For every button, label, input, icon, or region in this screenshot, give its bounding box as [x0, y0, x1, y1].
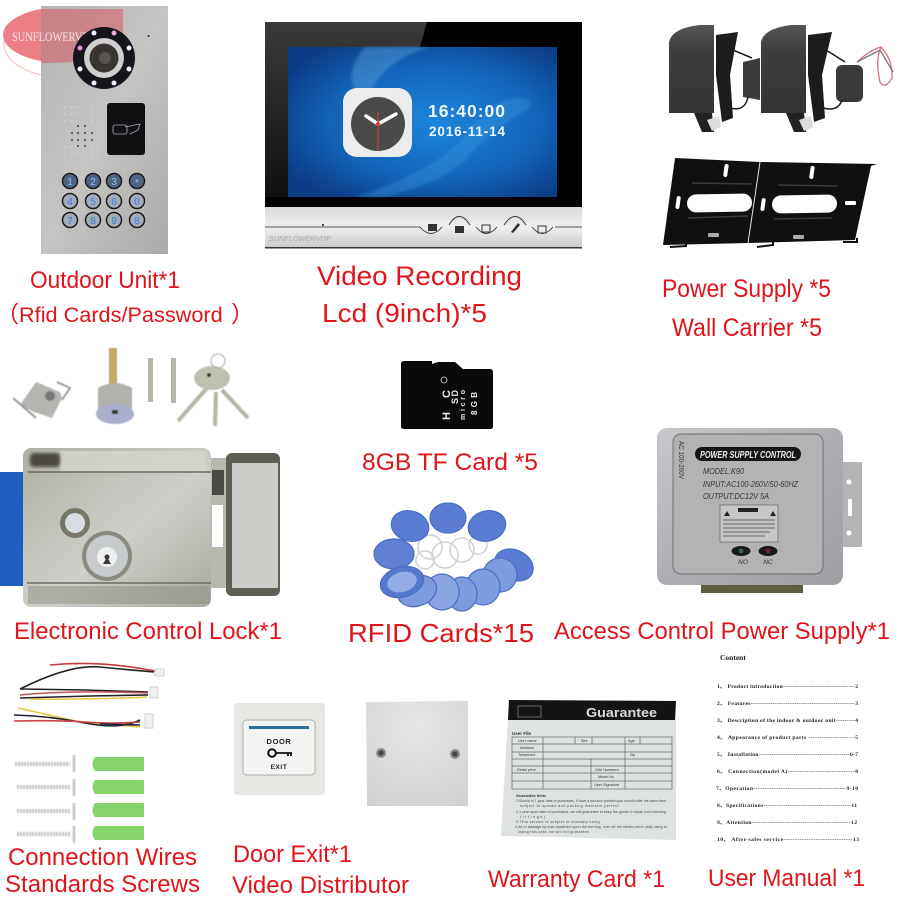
icon: manual contents page: 1、 Product introduction----------------------------------2 — [717, 684, 858, 690]
icon: door station: 5 — [90, 197, 96, 208]
caption: rfid cards / password: ） — [231, 301, 254, 327]
panel: tf card — [362, 361, 538, 476]
caption: power supply: Power Supply *5 — [662, 275, 831, 303]
icon: door station: 7 — [67, 216, 73, 227]
icon: door station: 2 — [90, 177, 96, 188]
panel: video monitor — [265, 22, 582, 328]
icon: door exit button: EXIT — [271, 764, 287, 771]
caption: lcd size: Lcd (9inch)*5 — [322, 298, 487, 328]
caption: connection wires: Connection Wires — [8, 844, 197, 871]
icon: manual contents page — [716, 653, 859, 843]
icon: lcd monitor: 16:40:00 — [428, 101, 505, 121]
caption: wall carrier: Wall Carrier *5 — [672, 314, 822, 342]
icon: lcd monitor: SUNFLOWERVOP — [269, 234, 331, 243]
icon: lcd monitor — [265, 22, 582, 248]
icon: manual contents page: Content — [720, 653, 746, 662]
icon: lock cylinder — [96, 348, 134, 424]
panel: door exit and video distributor — [232, 701, 468, 899]
icon: guarantee card: Retail price — [517, 768, 536, 772]
icon: power control box: NC — [763, 559, 773, 566]
icon: wall carriers — [663, 158, 877, 247]
caption: access control power supply: Access Control Power Supply*1 — [554, 618, 890, 645]
icon: guarantee card: Guarantee — [586, 705, 657, 720]
panel: power supply and wall carrier — [662, 25, 893, 342]
panel: electronic control lock — [0, 348, 282, 645]
icon: lcd monitor: 2016-11-14 — [429, 124, 505, 139]
caption: standards screws: Standards Screws — [5, 871, 200, 898]
icon: manual contents page: 10、 After-sales service------------------------------13 — [717, 837, 859, 843]
panel: access control power supply — [554, 428, 890, 645]
icon: video distributor box — [366, 701, 468, 806]
icon: door station: 1 — [67, 177, 73, 188]
caption: user manual: User Manual *1 — [708, 865, 865, 892]
icon: guarantee card: User File — [512, 731, 532, 736]
caption: warranty card: Warranty Card *1 — [488, 866, 665, 893]
icon: guarantee card: 4.All of damage by man-made/act upon the burning, over off the strides,emot nally using or — [515, 825, 668, 829]
icon: guarantee card: Model No — [598, 775, 614, 779]
icon: power adapters — [669, 25, 893, 132]
icon: guarantee card: Age — [628, 739, 635, 743]
icon: manual contents page: 9、Attention---------------------------------------------12 — [717, 820, 857, 826]
icon: micro sd card: 8GB — [470, 392, 479, 415]
icon: power control box: NO — [738, 559, 748, 566]
icon: mounting bracket — [13, 382, 70, 418]
panel: outdoor unit — [0, 6, 254, 327]
icon: rfid key fobs — [374, 503, 538, 612]
icon: manual contents page: 8、Specifications----------------------------------------11 — [717, 803, 857, 809]
icon: guarantee card: 1.Should in 1 year date of purchases, if have a function problem,you should offer the same item — [516, 799, 666, 803]
icon: electric lock body — [0, 448, 280, 607]
icon: manual contents page: 5、 Installation------------------------------------------6-7 — [717, 752, 858, 758]
panel: connection wires and screws — [5, 663, 200, 898]
icon: screws — [15, 755, 74, 843]
icon: micro sd card: HC — [441, 390, 453, 420]
icon: guarantee card: Telephone — [518, 753, 536, 757]
icon: door station: 6 — [111, 197, 117, 208]
caption: rfid cards / password: Rfid Cards/Password — [19, 302, 223, 327]
panel: user manual — [708, 653, 865, 892]
icon: door station: 3 — [111, 177, 117, 188]
icon: power control box: INPUT:AC100-260V/50-60HZ — [703, 480, 799, 489]
icon: door exit button — [234, 703, 325, 795]
icon: power control box: OUTPUT:DC12V 5A — [703, 492, 769, 501]
icon: guarantee card: Address — [520, 746, 534, 750]
icon: power control box — [657, 428, 862, 593]
caption: rfid cards: RFID Cards*15 — [348, 618, 534, 648]
icon: door exit button: DOOR — [267, 737, 291, 746]
icon: guarantee card: Guarantee Item: — [516, 793, 546, 798]
icon: manual contents page: 2、 Features------------------------------------------------3 — [717, 701, 858, 707]
icon: micro sd card — [401, 361, 493, 429]
icon: manual contents page: 6、 Connection(model A)-----------------------------8 — [717, 768, 858, 775]
icon: power control box: MODEL:K90 — [703, 467, 745, 476]
icon: green wall plugs — [92, 757, 144, 840]
icon: manual contents page: 4、 Appearance of product parts ---------------------5 — [717, 735, 858, 741]
icon: guarantee card: losing this card, we will not guarantee. — [518, 830, 590, 834]
icon: door station — [3, 6, 168, 254]
icon: guarantee card: Zip — [630, 753, 635, 757]
caption: outdoor unit: Outdoor Unit*1 — [30, 267, 180, 294]
icon: micro sd card: SD — [450, 390, 460, 404]
icon: guarantee card: User Signature — [594, 783, 619, 787]
caption: video recording: Video Recording — [317, 261, 522, 291]
icon: manual contents page: 3、 Description of the indoor & outdoor unit---------4 — [717, 718, 858, 724]
icon: door station: 0 — [134, 197, 140, 208]
icon: guarantee card: User name — [518, 739, 537, 743]
icon: door station: 8 — [134, 216, 140, 227]
panel: rfid cards — [348, 503, 538, 648]
icon: door station: 4 — [67, 197, 73, 208]
icon: screws — [148, 358, 176, 403]
icon: keys — [178, 354, 248, 426]
icon: door station: SUNFLOWERVP — [12, 29, 88, 44]
panel: warranty card — [488, 700, 676, 893]
caption: electronic control lock: Electronic Control Lock*1 — [14, 618, 282, 645]
icon: power control box: POWER SUPPLY CONTROL — [700, 450, 796, 461]
icon: door station: * — [135, 178, 139, 189]
icon: guarantee card — [501, 700, 676, 840]
icon: guarantee card: 3.This service is subject to normally using. — [516, 820, 601, 824]
icon: door station: 8 — [90, 216, 96, 227]
icon: power control box: AC 100-260V — [677, 441, 684, 479]
icon: manual contents page: 7、Operation-----------------------------------------9-10 — [716, 786, 858, 792]
icon: guarantee card: fittings) — [520, 815, 545, 819]
caption: video distributor: Video Distributor — [232, 872, 409, 899]
icon: guarantee card: Orld Numbers — [595, 768, 619, 772]
icon: guarantee card: 2.1 year upon date of purchases, we will guarantee to keep the goods in repair (not including — [516, 810, 666, 814]
icon: micro sd card: micro — [460, 390, 467, 420]
icon: door station: 9 — [111, 216, 117, 227]
icon: guarantee card: subject to speaks and packing maintain perfect. — [520, 804, 620, 808]
caption: tf card: 8GB TF Card *5 — [362, 449, 538, 476]
icon: guarantee card: Sex — [581, 739, 588, 743]
caption: door exit: Door Exit*1 — [233, 841, 352, 868]
icon: connection wires — [14, 663, 164, 728]
